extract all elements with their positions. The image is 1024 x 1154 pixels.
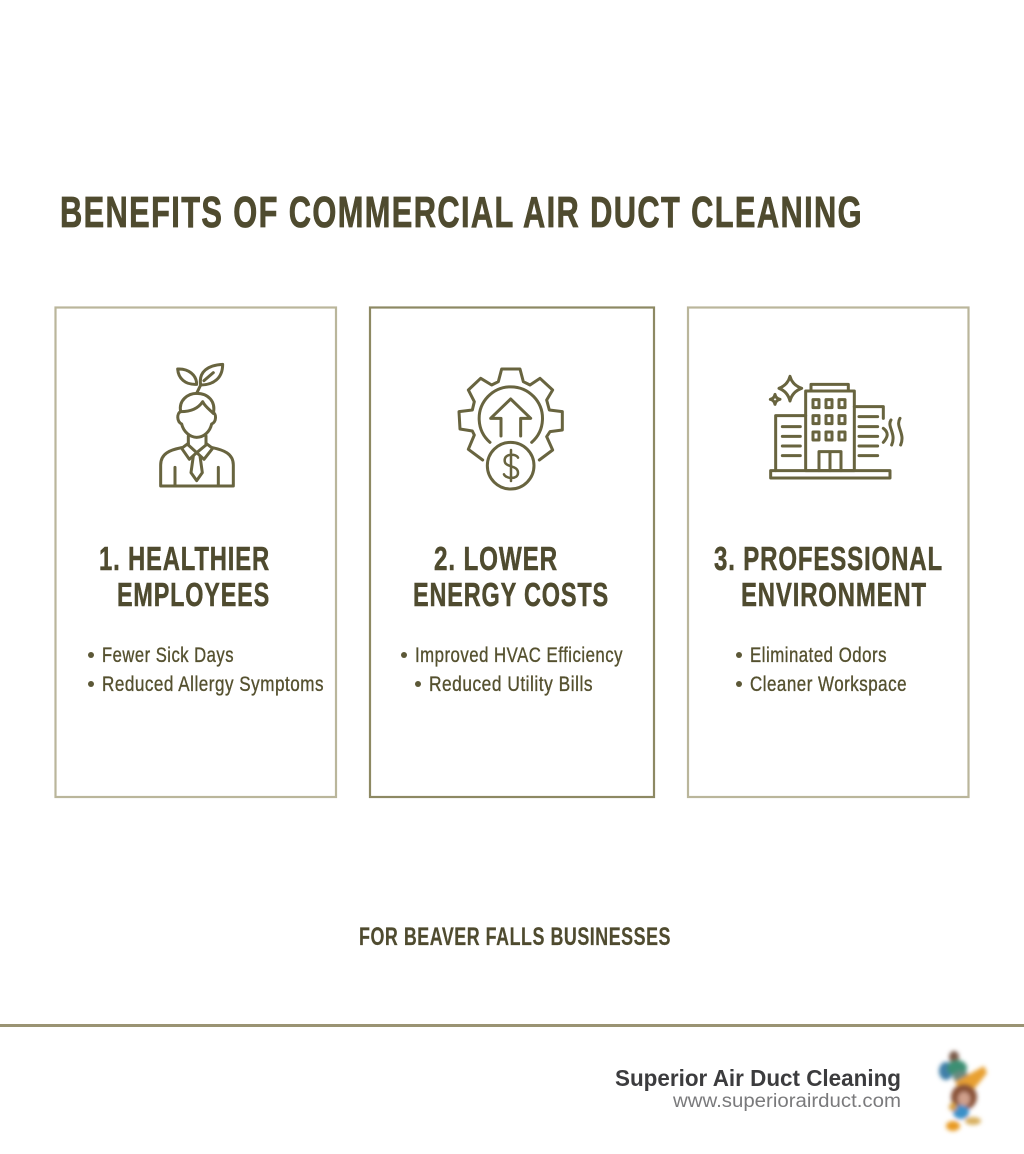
heading: healthier employees: EMPLOYEES [117,576,270,613]
footer brand: www.superiorairduct.com [672,1091,901,1112]
footer brand [615,1065,901,1112]
panel frame [688,308,968,797]
bullet list: professional environment: Eliminated Odors [750,644,887,667]
icon: gear with arrow and dollar coin [459,369,562,489]
heading: lower energy costs: 2. LOWER [434,540,558,577]
bullet list: healthier employees: Fewer Sick Days [102,644,234,667]
footer brand: Superior Air Duct Cleaning [615,1065,901,1091]
bullet list: lower energy costs: Reduced Utility Bills [429,673,593,696]
bullet list: healthier employees [88,644,324,696]
panel frame [370,308,654,797]
heading: professional environment: ENVIRONMENT [741,576,927,613]
panel: professional environment [688,308,968,797]
subtitle: FOR BEAVER FALLS BUSINESSES [359,923,671,951]
icon: duck mascot [939,1051,987,1131]
heading: lower energy costs [413,540,609,613]
heading: healthier employees: 1. HEALTHIER [99,540,270,577]
heading: healthier employees [99,540,270,613]
panel frame [56,308,336,797]
heading: lower energy costs: ENERGY COSTS [413,576,609,613]
panel: lower energy costs [370,308,654,797]
bullet list: healthier employees: Reduced Allergy Symptoms [102,673,324,696]
icon: person with sprout [161,364,233,486]
heading: professional environment: 3. PROFESSIONAL [714,540,943,577]
icon: clean office building [770,376,902,478]
heading: professional environment [714,540,943,613]
bullet list: lower energy costs: Improved HVAC Efficiency [415,644,623,667]
bullet list: professional environment [736,644,907,696]
bullet list: professional environment: Cleaner Workspace [750,673,907,696]
panel: healthier employees [56,308,336,797]
bullet list: lower energy costs [401,644,623,696]
